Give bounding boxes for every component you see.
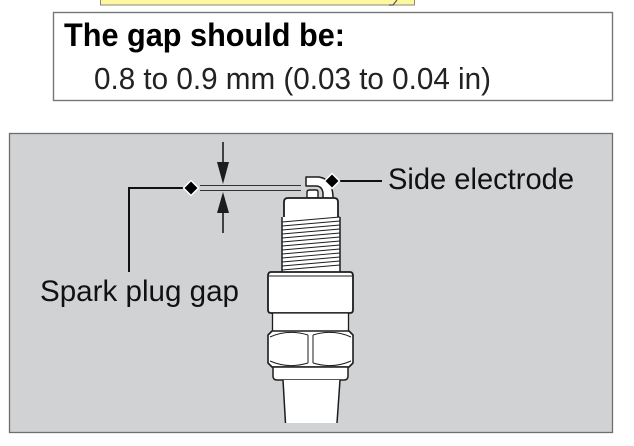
- upper collar: [268, 272, 353, 313]
- insulator: [283, 380, 340, 423]
- gap value: 0.8 to 0.9 mm (0.03 to 0.04 in): [94, 61, 491, 96]
- leader: side electrode: [324, 174, 382, 188]
- hex nut: [268, 331, 353, 367]
- neck: [272, 313, 348, 332]
- plug shoulder: [284, 198, 338, 218]
- leader: spark plug gap: [129, 180, 198, 272]
- gap reference lines: [200, 186, 301, 190]
- label: spark plug gap: Spark plug gap: [40, 275, 239, 308]
- panel: gap specification: [54, 12, 612, 100]
- spark plug illustration: [268, 177, 353, 423]
- gap arrows: [217, 142, 229, 233]
- threaded section: [282, 217, 340, 272]
- side electrode: [306, 177, 333, 199]
- lower collar: [273, 367, 348, 380]
- heading: The gap should be:: [64, 17, 345, 53]
- clipped yellow note box: [100, 0, 414, 5]
- centre electrode: [307, 190, 318, 198]
- label: side electrode: Side electrode: [388, 163, 574, 196]
- panel: spark plug diagram: [10, 134, 612, 432]
